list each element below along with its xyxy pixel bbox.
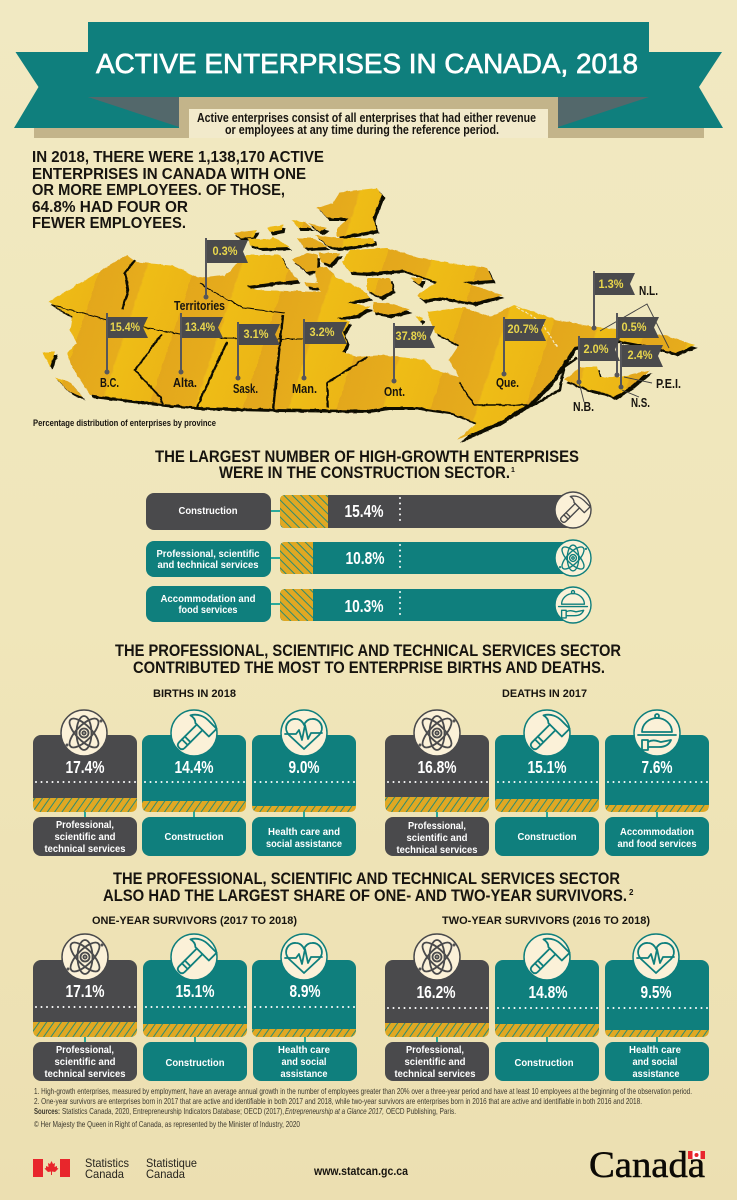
intro statement [32, 149, 324, 232]
heading: births and deaths [115, 642, 621, 677]
intro statement: IN 2018, THERE WERE 1,138,170 ACTIVE [32, 149, 324, 166]
title: ACTIVE ENTERPRISES IN CANADA, 2018 [96, 48, 638, 79]
card: deaths accommodation: and food services [618, 838, 697, 850]
card: two-year professional [385, 934, 489, 1081]
flag: N.L. 1.3%: 1.3% [598, 277, 624, 291]
flag: P.E.I. 0.5% [614, 313, 659, 378]
icon: heart [281, 934, 327, 980]
card: one-year health care: assistance [280, 1068, 328, 1080]
icon: atom [414, 710, 460, 756]
card: one-year professional: scientific and [54, 1056, 116, 1068]
flag: N.B. 2.0%: 2.0% [584, 342, 609, 356]
card: two-year health care: Health care [629, 1044, 681, 1056]
logo: Statistics Canada: Canada [146, 1167, 185, 1181]
flag: Ont. 37.8% [392, 323, 435, 384]
bar: accommodation: food services [178, 604, 238, 616]
card: two-year professional: technical services [394, 1068, 476, 1080]
flag: Territories 0.3%: 0.3% [212, 244, 238, 258]
card: births construction: Construction [164, 831, 224, 843]
footnotes: OECD Publishing, Paris. [386, 1106, 456, 1116]
heading: births and deaths: THE PROFESSIONAL, SCIENTIFIC AND TECHNICAL SERVICES SECTOR [115, 642, 621, 660]
province labels: Alta. [173, 376, 197, 390]
title ribbon [14, 22, 723, 138]
intro statement: ENTERPRISES IN CANADA WITH ONE [32, 166, 306, 183]
province labels: N.L. [639, 284, 658, 298]
card: deaths professional: 16.8% [418, 757, 457, 777]
icon: atom [61, 710, 107, 756]
card: two-year professional: Professional, [406, 1044, 464, 1056]
card: births professional: 17.4% [66, 757, 105, 777]
card: births health care: social assistance [266, 838, 342, 850]
map shadows [44, 191, 698, 443]
icon: hammer [522, 933, 570, 981]
flag: Man. 3.2% [302, 319, 347, 380]
heading: high-growth [155, 448, 579, 482]
flag: N.S. 2.4%: 2.4% [628, 348, 653, 362]
logo: Statistics Canada: Canada [85, 1167, 124, 1181]
icon: atom [555, 540, 591, 576]
icon: hammer [554, 492, 591, 528]
card: one-year health care: 8.9% [290, 981, 321, 1001]
icon: atom [62, 934, 108, 980]
icon: heart [633, 934, 679, 980]
bar: construction: Construction [178, 505, 238, 517]
province labels [100, 284, 681, 414]
footnotes [34, 1086, 692, 1129]
icon: hammer [169, 933, 217, 981]
card: deaths construction [495, 709, 599, 856]
footnotes: © Her Majesty the Queen in Right of Canada, as represented by the Minister of Industry, 2020 [34, 1119, 300, 1129]
subheading: two-year survivors: TWO-YEAR SURVIVORS (2016 TO 2018) [442, 915, 650, 927]
map caption: Percentage distribution of enterprises by province [33, 418, 216, 429]
icon: cloche [634, 710, 680, 756]
heading: high-growth: THE LARGEST NUMBER OF HIGH-GROWTH ENTERPRISES [155, 448, 579, 466]
card: one-year professional: 17.1% [66, 981, 105, 1001]
heading: high-growth: 1 [511, 467, 515, 474]
card: births professional: Professional, [56, 819, 114, 831]
bar: professional services: and technical services [158, 559, 259, 571]
province labels: Sask. [233, 382, 258, 396]
card: two-year health care: and social [632, 1056, 678, 1068]
flag: Sask. 3.1% [236, 322, 280, 380]
icon: cloche [555, 587, 591, 623]
bar: construction: 15.4% [344, 501, 384, 521]
icon: atom [414, 934, 460, 980]
card: births health care: 9.0% [288, 757, 320, 777]
card: births professional [33, 710, 137, 856]
bar: construction [146, 492, 591, 530]
card: two-year health care [605, 934, 709, 1081]
leader lines [579, 304, 669, 402]
subheading: deaths: DEATHS IN 2017 [502, 688, 587, 700]
heading: survivors: THE PROFESSIONAL, SCIENTIFIC AND TECHNICAL SERVICES SECTOR [113, 870, 620, 888]
footnotes: Entrepreneurship at a Glance 2017, [285, 1106, 384, 1116]
bar: accommodation: Accommodation and [160, 593, 256, 605]
bar: accommodation: 10.3% [344, 596, 384, 616]
card: two-year construction: Construction [514, 1057, 574, 1069]
province labels: N.S. [631, 396, 650, 410]
icon: hammer [169, 709, 217, 757]
card: deaths professional: Professional, [408, 820, 466, 832]
logo: Statistics Canada [33, 1156, 197, 1181]
card: one-year construction: 15.1% [176, 981, 215, 1001]
province labels: Man. [292, 382, 317, 396]
subheading: births: BIRTHS IN 2018 [153, 688, 236, 700]
card: one-year health care: and social [282, 1056, 327, 1068]
logo: Statistics Canada: Statistics [85, 1156, 129, 1170]
card: one-year construction: Construction [166, 1057, 224, 1069]
flag: B.C. 15.4% [104, 313, 148, 374]
province labels: Territories [174, 299, 225, 313]
map land [42, 188, 695, 440]
card: births health care [252, 710, 356, 856]
province labels: P.E.I. [656, 377, 681, 391]
card: deaths professional: technical services [396, 844, 478, 856]
intro statement: OR MORE EMPLOYEES. OF THOSE, [32, 182, 285, 199]
logo: Statistics Canada: Statistique [146, 1156, 197, 1170]
province labels: Ont. [384, 385, 405, 399]
province labels: Que. [496, 376, 519, 390]
card: one-year professional: technical services [44, 1068, 126, 1080]
bar: professional services: 10.8% [346, 548, 385, 568]
flag: Sask. 3.1%: 3.1% [244, 327, 269, 341]
card: deaths professional [385, 710, 489, 856]
card: deaths accommodation: 7.6% [642, 757, 673, 777]
flag: N.L. 1.3% [592, 271, 635, 330]
card: deaths construction: 15.1% [528, 757, 567, 777]
subtitle: Active enterprises consist of all enterprises that had either revenue [197, 111, 536, 125]
province labels: N.B. [573, 400, 594, 414]
flag: Man. 3.2%: 3.2% [310, 325, 335, 339]
map of Canada [42, 188, 698, 443]
card: two-year construction [495, 933, 599, 1081]
card: two-year professional: scientific and [404, 1056, 466, 1068]
province labels: B.C. [100, 376, 119, 390]
card: births health care: Health care and [268, 826, 340, 838]
card: deaths construction: Construction [518, 831, 576, 843]
subtitle: or employees at any time during the reference period. [225, 123, 499, 137]
intro statement: FEWER EMPLOYEES. [32, 215, 186, 232]
card: births professional: scientific and [54, 831, 116, 843]
flag: Que. 20.7% [502, 317, 546, 376]
bar: professional services: Professional, scientific [156, 548, 260, 560]
flag: Territories 0.3% [204, 238, 248, 300]
footnotes: Sources: [34, 1106, 60, 1116]
card: deaths professional: scientific and [406, 832, 468, 844]
card: one-year health care [252, 934, 357, 1081]
heading: high-growth: WERE IN THE CONSTRUCTION SECTOR. [219, 464, 510, 482]
heading: survivors: 2 [629, 888, 634, 897]
heading: survivors: ALSO HAD THE LARGEST SHARE OF ONE- AND TWO-YEAR SURVIVORS. [103, 887, 627, 905]
logo: Canada wordmark: Canada [589, 1145, 705, 1186]
card: two-year health care: assistance [632, 1068, 680, 1080]
flag: Alta. 13.4% [178, 313, 223, 374]
icon: hammer [522, 709, 570, 757]
subheading: one-year survivors: ONE-YEAR SURVIVORS (2017 TO 2018) [92, 915, 297, 927]
website: www.statcan.gc.ca [313, 1164, 408, 1178]
subtitle [197, 111, 536, 137]
card: one-year health care: Health care [278, 1044, 330, 1056]
flag: N.B. 2.0% [576, 336, 620, 384]
card: one-year construction [143, 933, 247, 1081]
card: one-year professional: Professional, [56, 1044, 114, 1056]
icon: heart [281, 710, 327, 756]
card: two-year construction: 14.8% [528, 982, 568, 1002]
intro statement: 64.8% HAD FOUR OR [32, 199, 188, 216]
flag: N.S. 2.4% [618, 342, 663, 390]
card: two-year professional: 16.2% [416, 982, 456, 1002]
flag: Que. 20.7%: 20.7% [508, 322, 539, 336]
card: births construction: 14.4% [174, 757, 214, 777]
provincial borders [52, 260, 577, 410]
card: births construction [142, 709, 246, 856]
card: two-year health care: 9.5% [640, 982, 672, 1002]
flag: Ont. 37.8%: 37.8% [396, 329, 427, 343]
heading: survivors [103, 870, 634, 905]
flag: Alta. 13.4%: 13.4% [185, 320, 215, 334]
flag: P.E.I. 0.5%: 0.5% [622, 320, 647, 334]
card: deaths accommodation [605, 710, 709, 856]
bar: accommodation [146, 586, 591, 623]
heading: births and deaths: CONTRIBUTED THE MOST TO ENTERPRISE BIRTHS AND DEATHS. [133, 659, 605, 677]
card: births professional: technical services [44, 843, 126, 855]
flag: B.C. 15.4%: 15.4% [110, 320, 140, 334]
card: deaths accommodation: Accommodation [620, 826, 694, 838]
footnotes: Statistics Canada, 2020, Entrepreneurship Indicators Database; OECD (2017), [62, 1106, 284, 1116]
bar: professional services [146, 540, 591, 577]
card: one-year professional [33, 934, 137, 1081]
